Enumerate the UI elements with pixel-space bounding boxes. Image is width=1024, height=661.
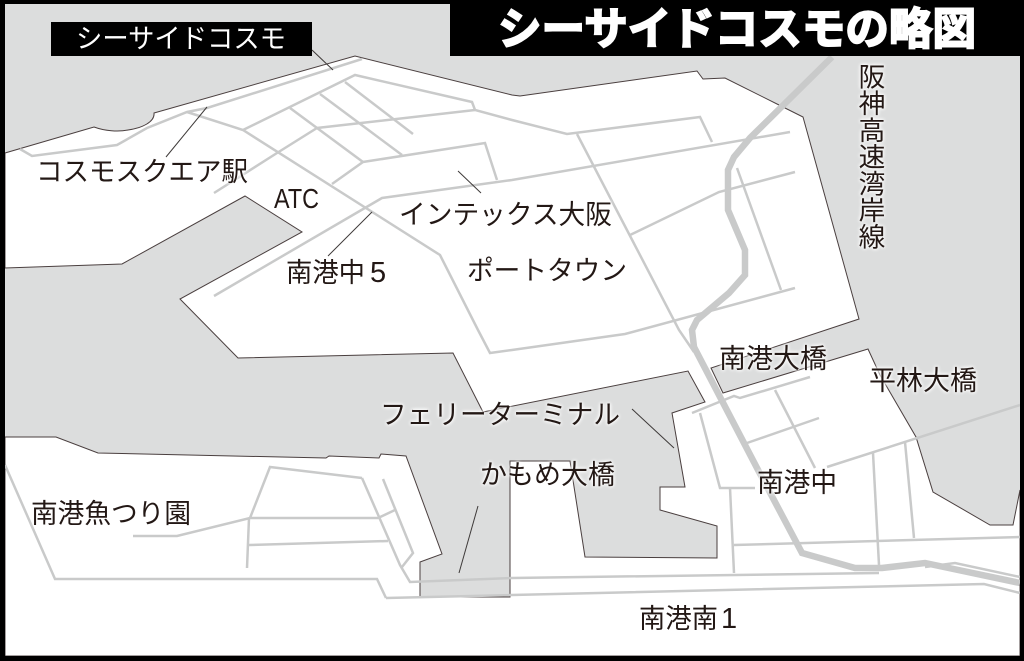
label: かもめ大橋: かもめ大橋	[480, 460, 615, 490]
label: 阪神高速湾岸線: 阪神高速湾岸線	[854, 63, 885, 250]
label: インテックス大阪: インテックス大阪	[399, 200, 612, 230]
label: 南港魚つり園: 南港魚つり園	[31, 499, 191, 529]
label: 平林大橋: 平林大橋	[869, 366, 977, 396]
title bar: シーサイドコスモの略図	[498, 5, 976, 54]
label: 南港中5: 南港中	[286, 258, 365, 288]
highway route	[692, 57, 1020, 583]
label: フェリーターミナル: フェリーターミナル	[380, 400, 620, 430]
label: コスモスクエア駅: コスモスクエア駅	[36, 157, 248, 187]
label: ATC: ATC	[274, 183, 319, 214]
label: 南港中: 南港中	[757, 468, 837, 498]
label: 南港中5: 5	[370, 257, 386, 289]
label: 南港大橋: 南港大橋	[719, 344, 827, 374]
label: 南港南1: 南港南	[639, 604, 718, 634]
leader lines	[166, 50, 674, 573]
label: ポートタウン: ポートタウン	[467, 256, 627, 286]
label box: シーサイドコスモ: シーサイドコスモ	[76, 24, 286, 54]
label: 南港南1: 1	[721, 603, 737, 635]
